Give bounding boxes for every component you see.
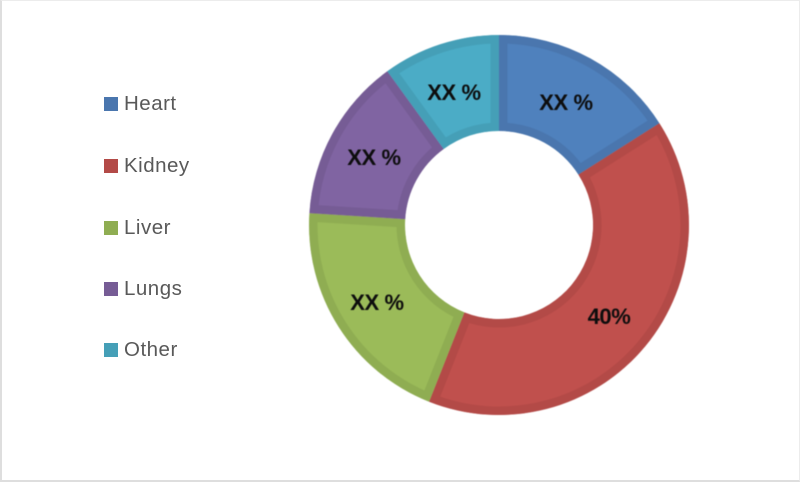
legend item: Kidney: Kidney (124, 154, 190, 177)
segment: Other: XX % (427, 80, 481, 105)
segment: Lungs: XX % (347, 145, 401, 170)
segment: Heart: XX % (539, 90, 593, 115)
legend (104, 92, 190, 361)
legend item: Liver: Liver (124, 216, 171, 239)
segment: Heart (499, 35, 659, 175)
segment: Lungs (309, 71, 444, 219)
segment: Liver (309, 213, 464, 402)
legend item: Other: Other (124, 338, 178, 361)
segment: Kidney (429, 123, 689, 415)
donut chart (308, 34, 690, 416)
segment: Kidney: 40% (588, 304, 630, 329)
legend item: Lungs: Lungs (124, 277, 182, 300)
segment: Liver: XX % (350, 290, 404, 315)
legend item: Heart: Heart (124, 92, 177, 115)
segment: Other (387, 35, 499, 149)
